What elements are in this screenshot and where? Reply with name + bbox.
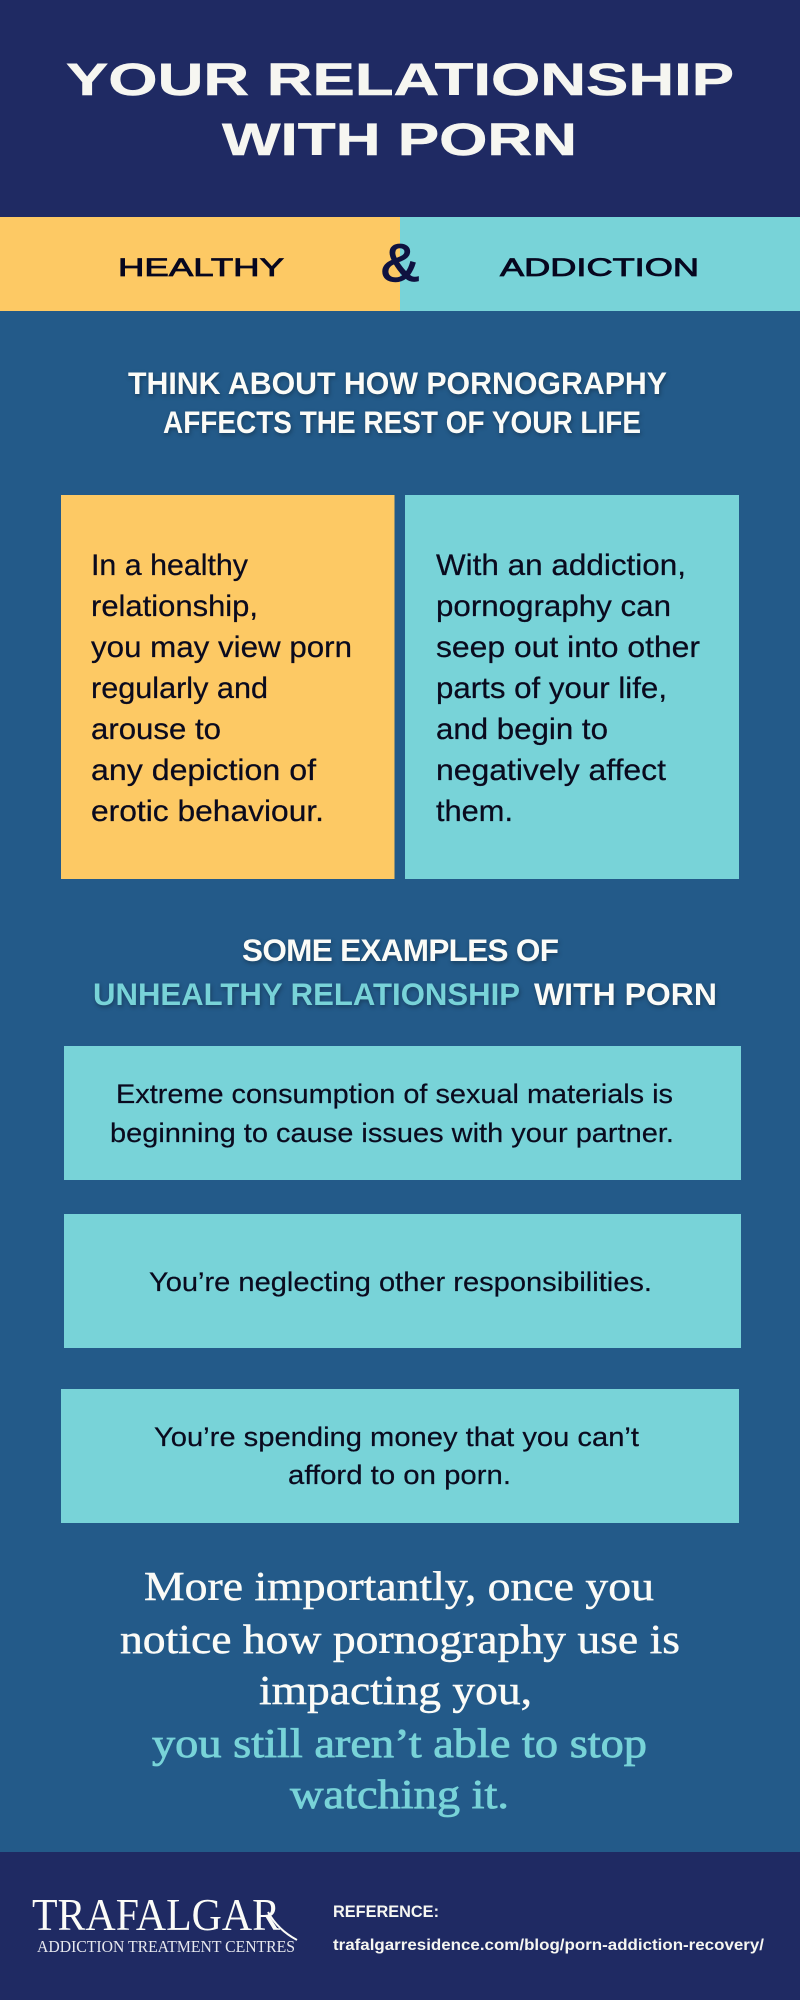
text block: healthy: erotic behaviour. bbox=[91, 795, 324, 828]
reference url: trafalgarresidence.com/blog/porn-addiction-recovery/ bbox=[333, 1937, 765, 1954]
heading: some examples bbox=[93, 932, 717, 1012]
logo: trafalgar: ADDICTION TREATMENT CENTRES bbox=[37, 1937, 295, 1956]
text block: addiction: them. bbox=[436, 795, 513, 828]
text block: addiction: parts of your life, bbox=[436, 672, 667, 705]
closing statement bbox=[120, 1563, 680, 1817]
header panel bbox=[0, 0, 800, 217]
example card: responsibilities: You’re neglecting other responsibilities. bbox=[149, 1267, 652, 1297]
closing statement: watching it. bbox=[290, 1771, 509, 1817]
example card: money: You’re spending money that you can’t bbox=[154, 1422, 640, 1452]
comparison band bbox=[0, 217, 800, 311]
example card: money bbox=[61, 1389, 739, 1523]
example card: partner issues bbox=[64, 1046, 741, 1180]
text block: healthy: In a healthy bbox=[91, 549, 248, 582]
closing statement: More importantly, once you bbox=[144, 1563, 654, 1609]
text block: healthy bbox=[91, 549, 352, 828]
heading: some examples: UNHEALTHY RELATIONSHIP bbox=[93, 976, 520, 1012]
text block: addiction: and begin to bbox=[436, 713, 608, 746]
text block: healthy: any depiction of bbox=[91, 754, 317, 787]
text block: healthy: you may view porn bbox=[91, 631, 352, 664]
reference label: REFERENCE: bbox=[333, 1903, 439, 1921]
title bbox=[66, 54, 734, 165]
title: WITH PORN bbox=[222, 114, 577, 165]
closing statement: you still aren’t able to stop bbox=[152, 1720, 647, 1766]
text block: healthy: arouse to bbox=[91, 713, 221, 746]
panel: healthy relationship bbox=[61, 495, 394, 879]
heading: think about: AFFECTS THE REST OF YOUR LIFE bbox=[163, 404, 641, 440]
closing statement: impacting you, bbox=[259, 1667, 532, 1713]
band label: addiction: ADDICTION bbox=[500, 254, 699, 282]
footer panel bbox=[0, 1852, 800, 2000]
text block: addiction bbox=[436, 549, 700, 828]
panel: addiction bbox=[405, 495, 739, 879]
text block: healthy: relationship, bbox=[91, 590, 258, 623]
band label: healthy: HEALTHY bbox=[118, 254, 284, 282]
example card: responsibilities bbox=[64, 1214, 741, 1348]
heading: think about: THINK ABOUT HOW PORNOGRAPHY bbox=[128, 365, 667, 401]
logo: trafalgar: TRAFALGAR bbox=[32, 1889, 280, 1940]
example card: partner issues: beginning to cause issues with your partner. bbox=[110, 1118, 674, 1148]
text block: addiction: pornography can bbox=[436, 590, 671, 623]
ampersand: & bbox=[381, 234, 419, 293]
title: YOUR RELATIONSHIP bbox=[66, 54, 734, 105]
text block: addiction: seep out into other bbox=[436, 631, 700, 664]
text block: addiction: With an addiction, bbox=[436, 549, 686, 582]
heading: some examples: SOME EXAMPLES OF bbox=[242, 932, 559, 968]
text block: healthy: regularly and bbox=[91, 672, 268, 705]
example card: partner issues: Extreme consumption of sexual materials is bbox=[116, 1079, 673, 1109]
heading: think about bbox=[128, 365, 667, 440]
heading: some examples: WITH PORN bbox=[534, 976, 717, 1012]
closing statement: notice how pornography use is bbox=[120, 1616, 680, 1662]
text block: addiction: negatively affect bbox=[436, 754, 667, 787]
example card: money: afford to on porn. bbox=[288, 1460, 511, 1490]
